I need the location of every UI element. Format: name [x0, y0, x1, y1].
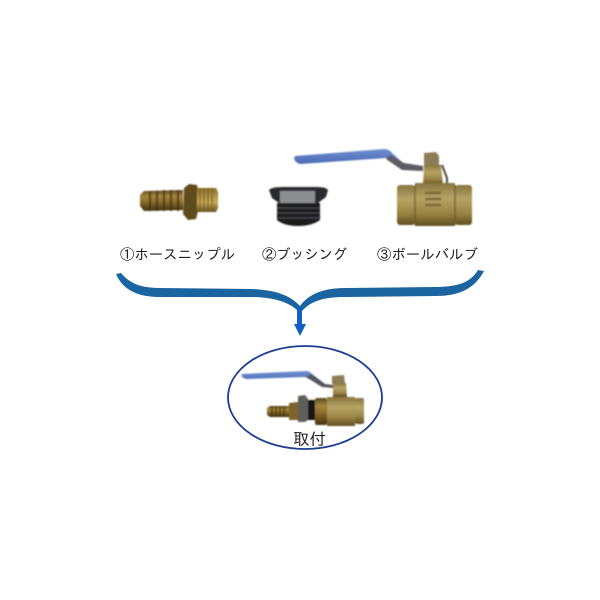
arrow: brace joining parts: [116, 270, 484, 336]
label: hose nipple: ①ホースニップル: [120, 246, 235, 264]
label: ball valve: ③ボールバルブ: [377, 246, 479, 264]
icon: assembled valve: [242, 371, 364, 426]
part 1: hose nipple: [140, 184, 218, 220]
label: assembled: 取付: [293, 431, 326, 449]
panel: assembled view: [228, 346, 382, 449]
label: bushing: ②ブッシング: [262, 246, 348, 264]
part 2: bushing: [269, 187, 328, 226]
part 3: ball valve: [294, 149, 472, 226]
